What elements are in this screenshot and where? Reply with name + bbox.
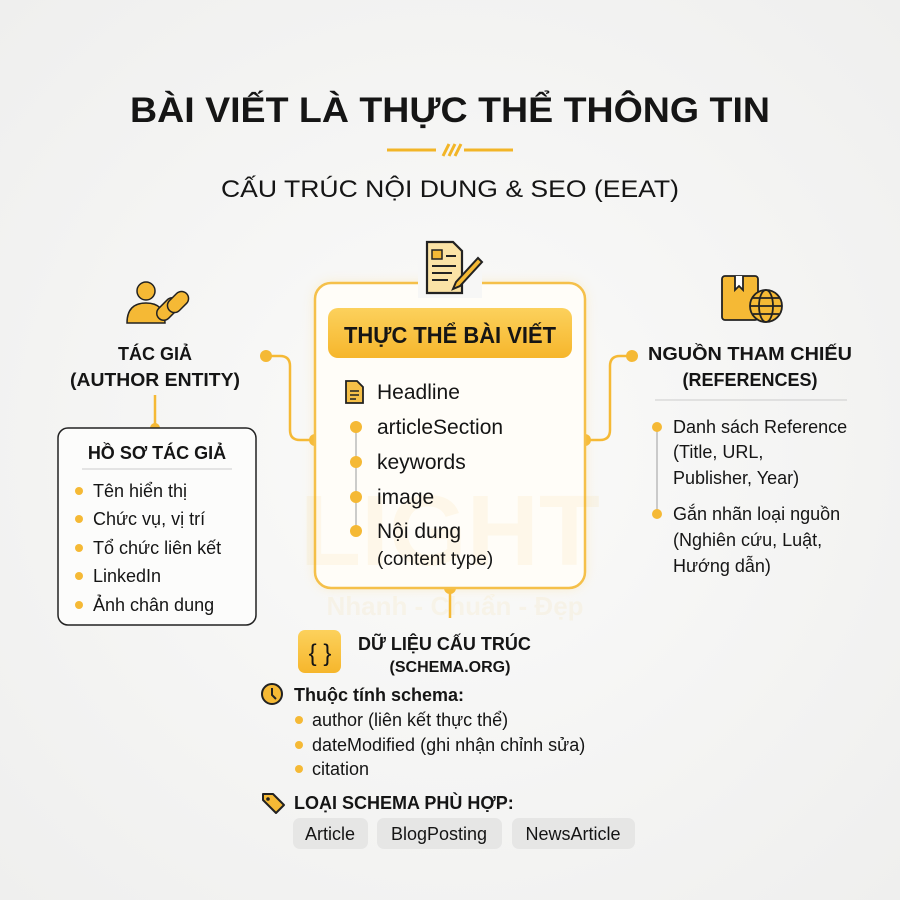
schema type pills (293, 818, 635, 849)
author title: TÁC GIẢ (118, 343, 192, 364)
panel: references: NGUỒN THAM CHIẾU (648, 343, 852, 364)
author profile box (58, 428, 256, 625)
panel: structured data: author (liên kết thực thể) (312, 710, 508, 730)
watermark: LIGHT (300, 475, 600, 587)
panel: author (58, 282, 256, 625)
item list: (content type) (377, 549, 493, 570)
panel: references: (Nghiên cứu, Luật, (673, 530, 822, 550)
panel: structured data: DỮ LIỆU CẤU TRÚC (358, 633, 531, 654)
schema type pills: NewsArticle (525, 824, 621, 844)
panel: references: Gắn nhãn loại nguồn (673, 503, 840, 524)
author profile box: Tổ chức liên kết (93, 538, 221, 558)
panel: structured data: Thuộc tính schema: (294, 685, 464, 705)
panel: center article entity (300, 283, 600, 621)
watermark: Nhanh - Chuẩn - Đẹp (326, 591, 584, 621)
panel: author: (AUTHOR ENTITY) (70, 370, 240, 390)
item list: Nội dung (377, 520, 461, 543)
icon: book and globe (722, 276, 782, 322)
title divider (387, 144, 513, 156)
icon: braces: { } (309, 640, 331, 667)
panel: references (648, 276, 852, 576)
panel: references: Danh sách Reference (673, 417, 847, 437)
panel: references: Hướng dẫn) (673, 555, 771, 576)
panel: structured data: LOẠI SCHEMA PHÙ HỢP: (294, 792, 514, 813)
schema type pills: BlogPosting (391, 824, 487, 844)
connectors (155, 356, 632, 618)
item list: image (377, 486, 434, 509)
panel: references: (Title, URL, (673, 442, 763, 462)
icon: clock (262, 684, 282, 704)
item list (346, 381, 503, 570)
schema type pills: Article (305, 824, 355, 844)
panel: structured data: (SCHEMA.ORG) (390, 659, 510, 676)
author profile box: Ảnh chân dung (93, 594, 214, 615)
panel: structured data: citation (312, 759, 369, 779)
icon: braces (298, 630, 341, 673)
icon: document with pencil (418, 238, 482, 298)
icon: tag (263, 794, 284, 813)
panel: references: Publisher, Year) (673, 468, 799, 488)
author profile box: LinkedIn (93, 566, 161, 586)
icon: person with link (127, 282, 191, 323)
panel: references: (REFERENCES) (682, 370, 818, 390)
panel: structured data: dateModified (ghi nhận chỉnh sửa) (312, 735, 585, 755)
item list: keywords (377, 451, 466, 474)
item list: Headline (377, 381, 460, 404)
title: BÀI VIẾT LÀ THỰC THỂ THÔNG TIN (130, 90, 770, 130)
header pill (328, 308, 572, 358)
header pill: THỰC THỂ BÀI VIẾT (344, 321, 556, 348)
author profile box: Chức vụ, vị trí (93, 509, 205, 529)
subtitle: CẤU TRÚC NỘI DUNG & SEO (EEAT) (221, 175, 679, 203)
author profile box: HỒ SƠ TÁC GIẢ (88, 442, 226, 463)
panel: structured data (262, 630, 635, 849)
author profile box: Tên hiển thị (93, 481, 187, 501)
item list: articleSection (377, 416, 503, 439)
